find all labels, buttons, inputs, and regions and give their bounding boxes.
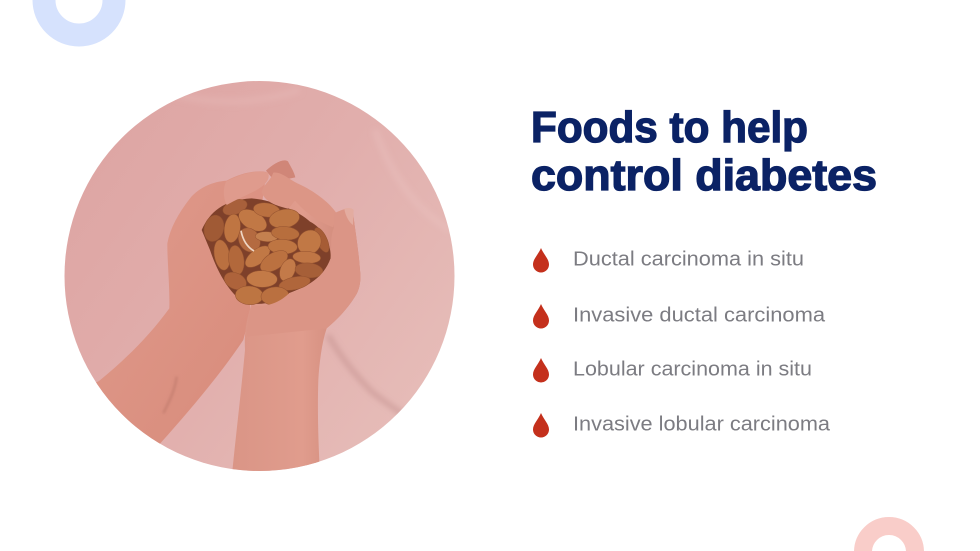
photo: hands holding almonds	[60, 80, 460, 483]
label 2: Invasive ductal carcinoma	[573, 304, 826, 326]
icon: drop 1	[533, 248, 549, 272]
item 4	[533, 413, 831, 438]
right fingers	[263, 172, 336, 212]
thumbnail	[344, 208, 354, 225]
list	[533, 248, 831, 438]
item 1	[533, 248, 804, 272]
decorative ring: top left	[44, 0, 114, 35]
label 3: Lobular carcinoma in situ	[573, 358, 812, 380]
right palm over almonds	[269, 209, 360, 326]
icon: drop 2	[533, 304, 549, 328]
back fingers	[266, 160, 296, 178]
icon: drop 3	[533, 358, 549, 382]
arm vein	[163, 377, 177, 413]
title: control diabetes	[531, 151, 877, 200]
almonds	[201, 196, 332, 306]
decorative ring: bottom right	[863, 526, 915, 551]
icon: drop 4	[533, 413, 549, 438]
item 2	[533, 304, 826, 328]
label 4: Invasive lobular carcinoma	[573, 414, 831, 436]
almond highlight	[241, 231, 254, 251]
title: Foods to help	[531, 103, 808, 152]
almond bed shadow	[202, 198, 331, 304]
right arm and hand	[232, 200, 360, 471]
label 1: Ductal carcinoma in situ	[573, 248, 804, 270]
title	[531, 103, 877, 200]
item 3	[533, 358, 812, 382]
left thumb	[224, 172, 269, 205]
left arm and hand	[96, 171, 266, 444]
